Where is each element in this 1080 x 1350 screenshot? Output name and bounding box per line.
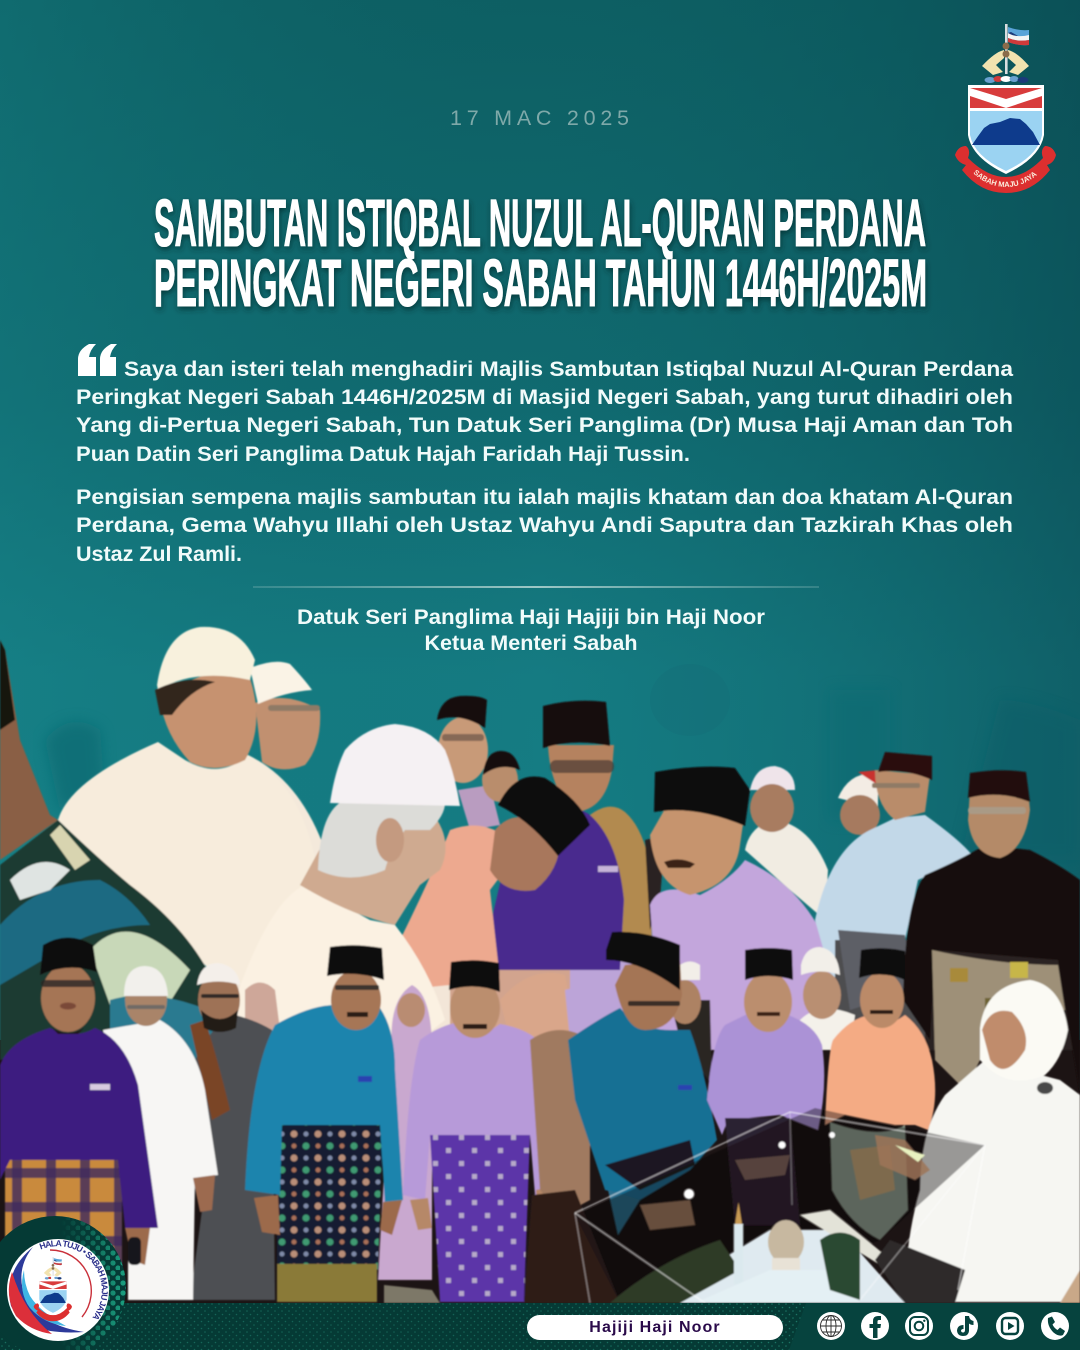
photo backdrop bbox=[0, 664, 1080, 1303]
glass case with mosque model bbox=[575, 1108, 985, 1303]
statement text: Saya dan isteri telah menghadiri Majlis Sambutan Istiqbal Nuzul Al-Quran Perdana bbox=[124, 358, 1013, 381]
hands over the case bbox=[640, 1135, 930, 1230]
man in blue baju bbox=[568, 932, 717, 1235]
photo collage bbox=[0, 627, 1080, 1303]
coat of arms of Sabah: SABAH MAJU JAYA bbox=[974, 170, 1037, 187]
faded middle guests bbox=[245, 947, 855, 1085]
signature bbox=[297, 605, 766, 655]
man in lilac baju and purple sarong bbox=[403, 960, 560, 1302]
name pill: Hajiji Haji Noor bbox=[589, 1319, 721, 1336]
man in purple baju with glasses bbox=[480, 701, 624, 970]
man in black baju with gold sarong bbox=[903, 770, 1080, 1095]
icon: instagram bbox=[905, 1312, 933, 1340]
man in lilac baju second row bbox=[707, 948, 824, 1225]
statement text: Puan Datin Seri Panglima Datuk Hajah Faridah Haji Tussin. bbox=[76, 443, 690, 466]
icon: facebook bbox=[861, 1312, 889, 1340]
title bbox=[154, 186, 927, 321]
icon: phone bbox=[1041, 1312, 1069, 1340]
left man in white cap bbox=[58, 627, 325, 990]
man in purple baju and plaid sarong bbox=[0, 938, 158, 1275]
man in tan baju behind bbox=[590, 807, 665, 940]
coat of arms of Sabah bbox=[955, 24, 1056, 193]
middle band behind the front row bbox=[210, 940, 1080, 1050]
statement text bbox=[76, 358, 1013, 566]
icon: youtube bbox=[996, 1312, 1024, 1340]
circular badge logo bbox=[0, 1216, 126, 1350]
man in salmon baju bbox=[825, 948, 935, 1240]
statement text: Pengisian sempena majlis sambutan itu ialah majlis khatam dan doa khatam Al-Quran bbox=[76, 486, 1013, 509]
statement text: Yang di-Pertua Negeri Sabah, Tun Datuk Seri Panglima (Dr) Musa Haji Aman dan Toh bbox=[76, 414, 1013, 437]
man in white robe bbox=[103, 966, 218, 1300]
bottom bar bbox=[0, 1303, 1080, 1350]
faded figure and floor bbox=[384, 1030, 620, 1303]
old man in white cap bbox=[235, 724, 460, 1040]
name pill bbox=[527, 1315, 783, 1340]
woman in white hijab bbox=[905, 980, 1080, 1303]
icon: tiktok bbox=[950, 1312, 978, 1340]
man in teal blue baju and batik sarong bbox=[245, 945, 403, 1302]
signature: Datuk Seri Panglima Haji Hajiji bin Haji Noor bbox=[297, 605, 766, 629]
quote mark bbox=[78, 344, 117, 376]
statement text: Peringkat Negeri Sabah 1446H/2025M di Masjid Negeri Sabah, yang turut dihadiri oleh bbox=[76, 386, 1013, 409]
man in pale blue baju bbox=[815, 752, 972, 1010]
far-left man with patterned shirt bbox=[0, 640, 240, 1060]
date: 17 MAC 2025 bbox=[450, 106, 633, 130]
man with small songkok bbox=[437, 696, 520, 830]
woman in lilac hijab bbox=[378, 985, 432, 1280]
man in pink baju bowing bbox=[395, 777, 590, 990]
main man in lilac baju bbox=[650, 767, 828, 1040]
icon: globe bbox=[817, 1312, 845, 1340]
circular badge logo: HALA TUJU • SABAH MAJU JAYA bbox=[39, 1240, 108, 1320]
man in grey robe with brown sash bbox=[190, 963, 275, 1300]
statement text: Ustaz Zul Ramli. bbox=[76, 543, 242, 566]
back row: distant guests bbox=[745, 766, 880, 920]
signature: Ketua Menteri Sabah bbox=[424, 631, 638, 655]
statement text: Perdana, Gema Wahyu Illahi oleh Ustaz Wahyu Andi Saputra dan Tazkirah Khas oleh bbox=[76, 514, 1013, 537]
